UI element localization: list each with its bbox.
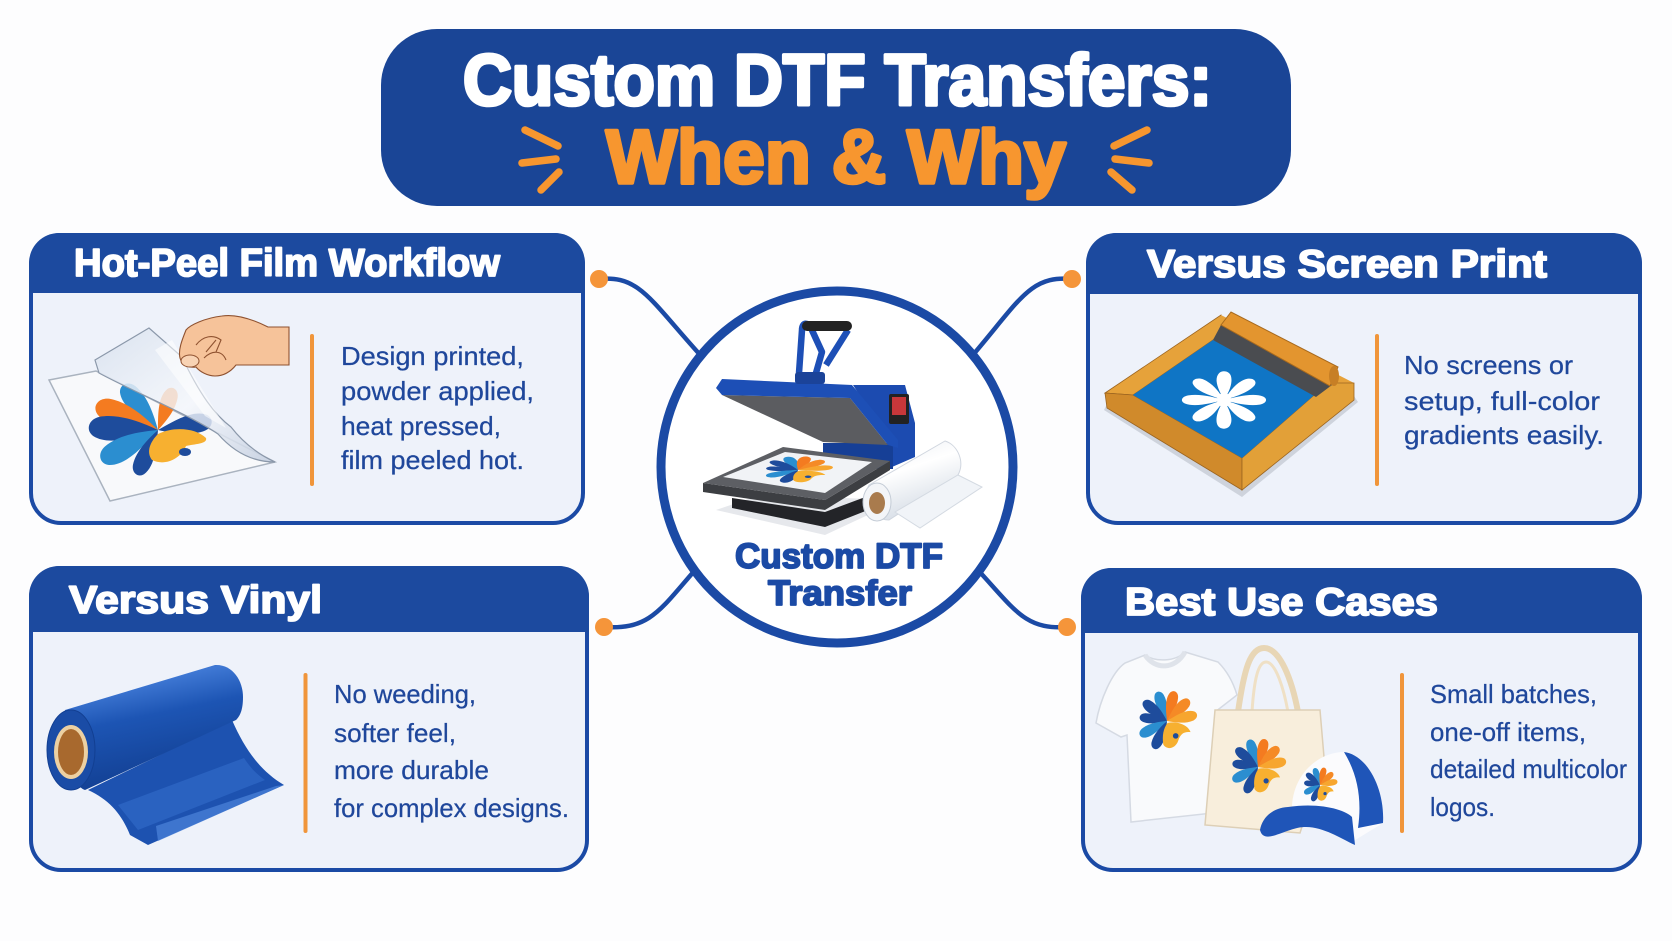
body text: Small batches,	[1430, 679, 1597, 709]
body text	[1430, 679, 1627, 822]
body text	[334, 679, 569, 823]
subtitle: When and Why: When & Why	[606, 115, 1066, 200]
body text: one-off items,	[1430, 717, 1586, 747]
divider	[1375, 334, 1379, 486]
icon: screen frame with squeegee	[1104, 312, 1358, 497]
body text: more durable	[334, 755, 489, 785]
central circle: custom DTF transfer	[661, 291, 1013, 643]
panel: best use cases	[1081, 568, 1642, 870]
title banner	[381, 29, 1291, 206]
heading: Hot-Peel Film Workflow	[74, 242, 501, 285]
icon: heat press with film roll	[703, 321, 982, 535]
body text: heat pressed,	[341, 411, 501, 441]
label line 2: Transfer	[768, 574, 912, 613]
icon: tote bag	[1205, 648, 1324, 833]
heading: Best Use Cases	[1125, 581, 1438, 624]
icon: right sparks	[1111, 130, 1149, 190]
icon: cap	[1260, 752, 1383, 845]
label: Custom DTF	[735, 537, 943, 576]
body text: setup, full-color	[1404, 386, 1600, 416]
title line: Custom DTF Transfers: Custom DTF Transfers:	[463, 41, 1212, 121]
body text: for complex designs.	[334, 793, 569, 823]
body text	[1404, 350, 1604, 450]
divider	[310, 334, 314, 486]
body text: logos.	[1430, 792, 1495, 822]
body text: No screens or	[1404, 350, 1573, 380]
icon: blue vinyl roll	[47, 665, 284, 845]
icon: film peeled from printed sheet by hand	[49, 315, 289, 501]
heading: Versus Screen Print	[1147, 243, 1547, 286]
body text	[341, 341, 534, 475]
panel: versus vinyl	[29, 566, 589, 870]
body text: film peeled hot.	[341, 445, 524, 475]
connector dots	[590, 270, 1081, 636]
icon: left sparks	[522, 130, 559, 190]
divider	[1400, 673, 1404, 833]
body text: softer feel,	[334, 718, 456, 748]
body text: gradients easily.	[1404, 420, 1604, 450]
body text: detailed multicolor	[1430, 754, 1627, 784]
panel: versus screen print	[1086, 233, 1642, 523]
heading: Versus Vinyl	[69, 579, 322, 622]
body text: No weeding,	[334, 679, 476, 709]
body text: powder applied,	[341, 376, 534, 406]
body text: Design printed,	[341, 341, 524, 371]
icon: t-shirt	[1096, 652, 1237, 822]
divider	[304, 673, 308, 833]
connector lines	[599, 279, 1072, 627]
panel: hot-peel film workflow	[29, 233, 585, 523]
